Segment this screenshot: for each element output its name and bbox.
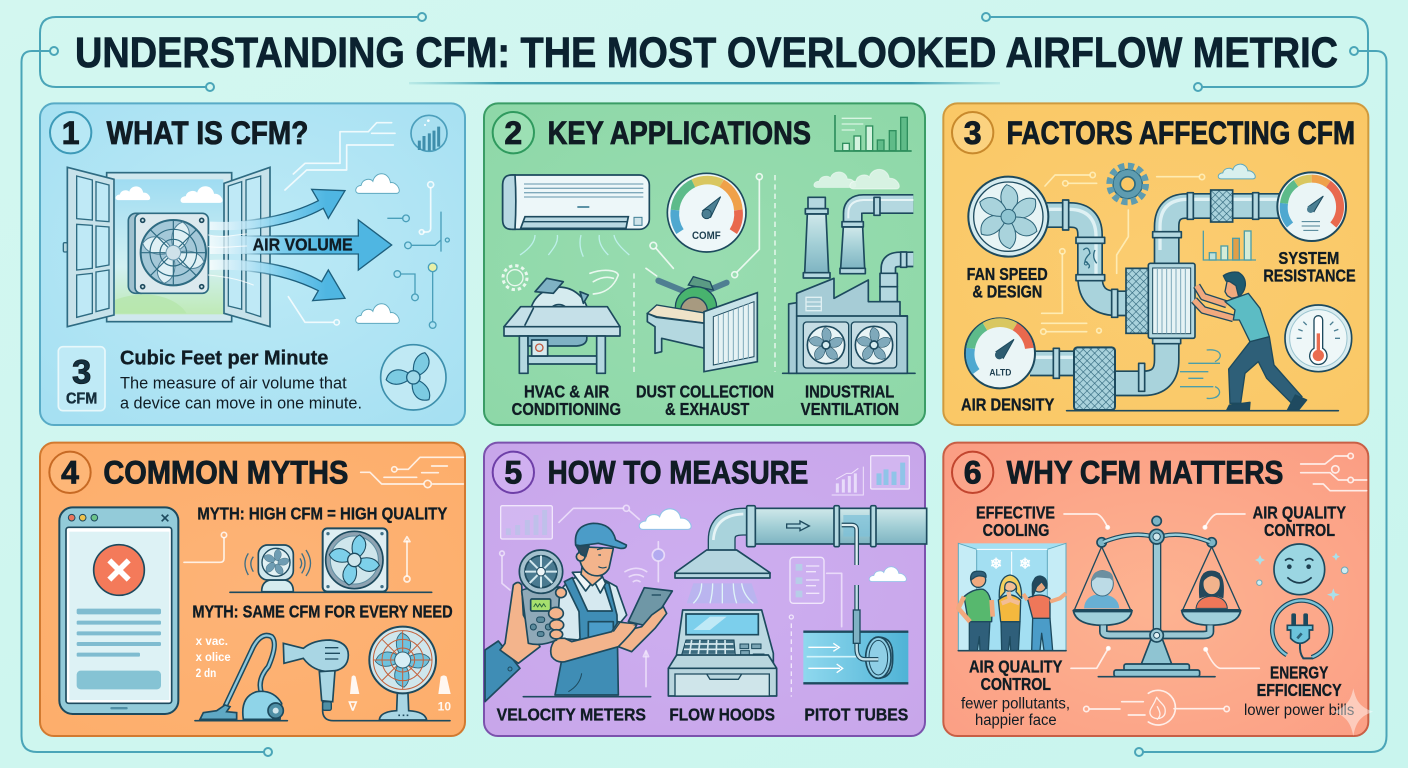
illustration: dust collection (647, 277, 757, 372)
definition text (120, 346, 362, 412)
panel 5: how to measure (484, 443, 927, 736)
number badge 3: 3 (964, 115, 982, 151)
3 CFM badge: 3 (72, 353, 91, 391)
circuit lines (1301, 453, 1367, 491)
illustration: filter unit (1126, 263, 1195, 344)
illustration: small loud fan vs big fan (184, 528, 432, 592)
illustration: hair dryer (283, 640, 450, 721)
illustration: comfort gauge: COMF (692, 230, 721, 242)
myth 2 heading: MYTH: SAME CFM FOR EVERY NEED (192, 601, 453, 621)
panel 4: common myths (40, 443, 465, 736)
labels: AIR QUALITY (969, 656, 1063, 676)
labels: ENERGY (1270, 662, 1329, 682)
bottom flame circuit (1084, 690, 1229, 725)
labels: DUST COLLECTION (636, 381, 774, 401)
labels: EFFICIENCY (1257, 680, 1342, 700)
illustration: people in cooled room (958, 543, 1066, 651)
icon: power plug (1272, 600, 1331, 658)
illustration: console (668, 610, 777, 696)
illustration: balance scale (1073, 516, 1241, 677)
labels: AIR QUALITY (1253, 502, 1346, 522)
icon: bar chart (835, 115, 912, 151)
panel 6: why CFM matters (943, 443, 1373, 736)
number badge 6 (952, 452, 993, 493)
number badge 2: 2 (504, 115, 522, 151)
labels: lower power bills (1244, 702, 1355, 719)
circuit lines (361, 457, 463, 488)
illustration: people in cooled room: ❄ (990, 556, 1002, 572)
small white notes: x vac. (196, 634, 228, 648)
ground line and wind (1067, 350, 1338, 411)
labels: VELOCITY METERS (497, 705, 646, 725)
labels: EFFECTIVE (976, 502, 1055, 522)
illustration: flow hood (675, 514, 770, 603)
icon: circular chart (411, 115, 447, 151)
labels: INDUSTRIAL (805, 381, 895, 401)
number badge 3 (952, 112, 993, 153)
illustration: technician with tablet (485, 523, 672, 702)
labels: CONTROL (1264, 520, 1335, 540)
small white notes (196, 634, 231, 680)
arrows: air volume (208, 189, 392, 301)
definition text: Cubic Feet per Minute (120, 346, 328, 369)
definition text: The measure of air volume that (120, 373, 347, 392)
number badge 5 (493, 452, 534, 493)
sparkle watermark (1333, 688, 1373, 736)
labels: COOLING (983, 520, 1049, 540)
heading: KEY APPLICATIONS (548, 114, 811, 151)
label: air volume: AIR VOLUME (253, 235, 353, 255)
clouds (356, 174, 399, 323)
labels: FAN SPEED (967, 264, 1048, 284)
circuits and cloud (500, 505, 906, 687)
small white symbols: ∇ (348, 700, 359, 714)
illustration: comfort gauge (667, 173, 746, 252)
labels (961, 502, 1355, 729)
heading: WHY CFM MATTERS (1007, 453, 1283, 490)
labels: PITOT TUBES (804, 705, 908, 725)
labels: RESISTANCE (1263, 266, 1356, 286)
gauge: air density (965, 318, 1035, 388)
illustration: air conditioner (503, 175, 649, 257)
number badge 1 (50, 112, 91, 153)
labels: fewer pollutants, (961, 695, 1070, 712)
illustration: fan speed fan (968, 177, 1048, 257)
labels: CONTROL (981, 674, 1051, 694)
labels (961, 248, 1356, 415)
small white symbols: 10 (438, 700, 451, 714)
labels: & EXHAUST (665, 399, 750, 419)
panel 2: key applications (484, 103, 925, 425)
labels: AIR DENSITY (961, 395, 1055, 415)
small white notes: x olice (196, 650, 231, 664)
title underline (409, 82, 1000, 84)
labels (497, 705, 908, 725)
base line (523, 694, 651, 699)
panel 3: factors affecting CFM (943, 103, 1368, 425)
small white symbols (348, 675, 451, 714)
gauge: air density: ALTD (989, 368, 1012, 378)
illustration: factory with stacks (783, 169, 915, 373)
illustration: tablet error screen (59, 507, 178, 714)
illustration: pitot tube (803, 585, 908, 683)
gauge: system resistance (1277, 172, 1346, 241)
circuit lines top (285, 123, 395, 190)
illustration: man pushing (1194, 272, 1307, 410)
icons: small charts (501, 456, 909, 539)
illustration: vacuum cleaner (195, 635, 287, 721)
illustration: mesh filter (1074, 347, 1115, 410)
definition text: a device can move in one minute. (120, 393, 362, 412)
labels: & DESIGN (972, 281, 1042, 301)
connector lines (1064, 514, 1259, 668)
illustration: people in cooled room: ❄ (1019, 556, 1031, 572)
3 CFM badge: CFM (66, 390, 97, 407)
number badge 5: 5 (504, 455, 522, 491)
number badge 6: 6 (964, 455, 982, 491)
gauge: thermometer (1285, 305, 1352, 372)
decorative circuits and gear (503, 174, 775, 373)
small white notes: 2 dn (196, 666, 216, 680)
illustration: desk fan (369, 627, 436, 720)
pitot checklist and dashed line (789, 557, 824, 697)
number badge 2 (493, 112, 534, 153)
labels: VENTILATION (801, 399, 899, 419)
myth 1 heading: MYTH: HIGH CFM = HIGH QUALITY (197, 503, 448, 523)
number badge 4: 4 (61, 455, 79, 491)
labels: SYSTEM (1278, 248, 1339, 268)
heading: COMMON MYTHS (103, 453, 348, 490)
icon: smiley face (1255, 544, 1348, 601)
heading: WHAT IS CFM? (107, 114, 308, 151)
illustration: duct with probe (747, 506, 927, 565)
illustration: pipes (1030, 199, 1283, 383)
heading: HOW TO MEASURE (548, 453, 808, 490)
circuit lines right (288, 182, 449, 328)
pipe flanges (1053, 190, 1259, 391)
3 CFM badge (58, 347, 105, 411)
icon: fan (381, 345, 446, 410)
labels: HVAC & AIR (524, 381, 610, 401)
labels: FLOW HOODS (669, 705, 775, 725)
labels (512, 381, 899, 419)
panel 1: what is CFM (40, 103, 465, 425)
illustration: open window with fan (63, 167, 270, 327)
labels: CONDITIONING (512, 399, 621, 419)
number badge 4 (49, 452, 91, 493)
icon: bar chart (1203, 231, 1256, 260)
number badge 1: 1 (62, 115, 80, 151)
illustration: table saw (504, 278, 620, 373)
labels: happier face (975, 712, 1057, 729)
circuits gear cloud (1041, 164, 1255, 334)
